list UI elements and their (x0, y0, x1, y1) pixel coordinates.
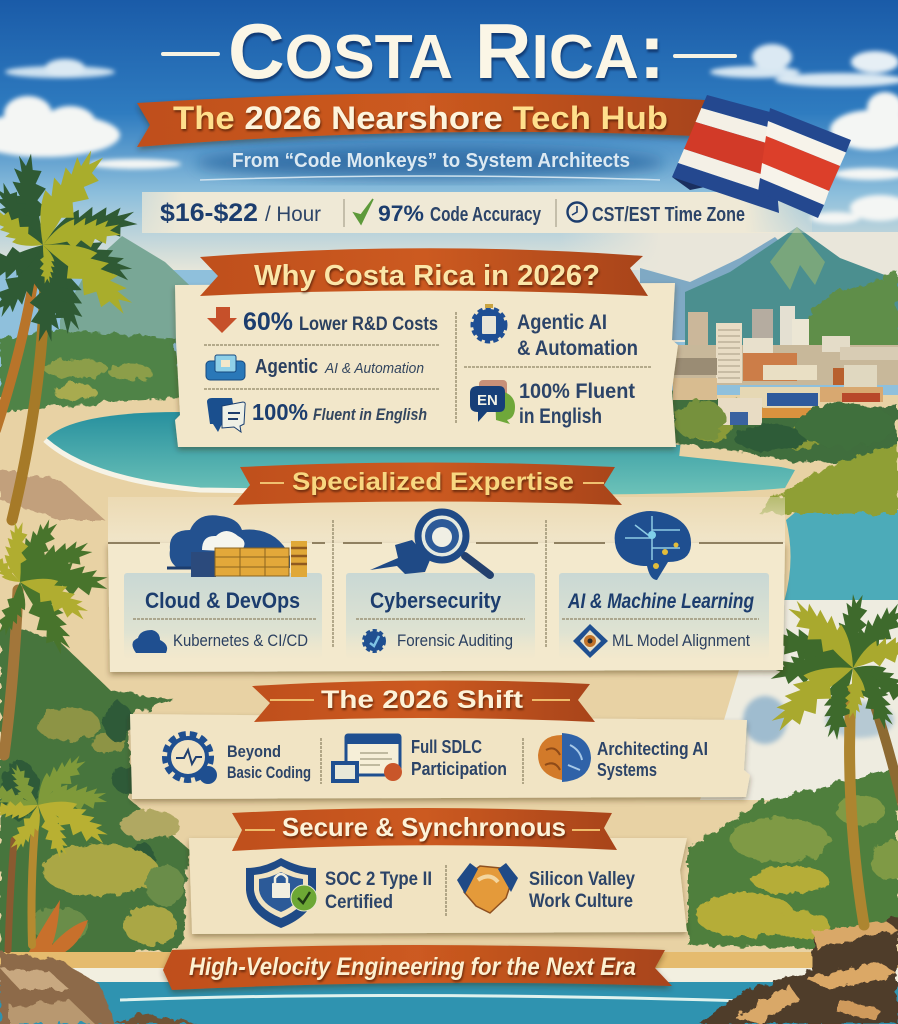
label: ml alignment: ML Model Alignment (612, 631, 750, 650)
clouds (0, 44, 898, 224)
heading: cybersecurity: Cybersecurity (370, 588, 502, 613)
text: architecting ai: Architecting AI (597, 739, 708, 759)
title: COSTA RICA: (228, 7, 665, 95)
icon: diamond eye (573, 624, 608, 658)
text: full sdlc: Participation (411, 759, 507, 779)
far clouds right (743, 696, 894, 744)
text: beyond coding (227, 742, 311, 782)
icon: automation device (206, 355, 245, 380)
pale sky behind mountains (560, 232, 898, 342)
rocks (0, 917, 898, 1024)
heading ribbon: specialized expertise: Specialized Expertise (292, 468, 574, 496)
footer ribbon (163, 945, 672, 990)
stats strip (142, 192, 812, 233)
palm trees (0, 140, 898, 950)
icon: small gear (364, 631, 384, 651)
heading: ai ml: AI & Machine Learning (567, 590, 754, 613)
bottom beach and sea (0, 962, 898, 1024)
icon: magnifier and fin (370, 512, 490, 575)
panel: the 2026 shift (130, 680, 750, 799)
item: lower costs: 60% (243, 308, 293, 336)
text: architecting ai: Systems (597, 760, 657, 780)
label: in english: in English (519, 405, 602, 428)
icon: shield with check (246, 858, 317, 928)
panel: secure and synchronous (189, 808, 687, 934)
label: forensic: Forensic Auditing (397, 631, 513, 650)
text: silicon valley (529, 869, 635, 912)
heading: cloud devops: Cloud & DevOps (145, 588, 300, 613)
text: full sdlc (411, 737, 507, 779)
flag (672, 95, 851, 218)
heading ribbon: the 2026 shift: The 2026 Shift (321, 686, 524, 714)
icon: chat bubbles (207, 398, 245, 432)
stats strip: CST/EST Time Zone (592, 204, 745, 226)
icon: handshake (457, 863, 518, 913)
item: agentic: Agentic (255, 356, 318, 378)
heading ribbon: why costa rica (200, 248, 648, 296)
heading ribbon: secure: Secure & Synchronous (282, 812, 566, 842)
label: automation: & Automation (517, 337, 638, 360)
text: soc 2 (325, 869, 432, 913)
heading ribbon: specialized expertise (233, 462, 622, 505)
foreground trees below city (674, 400, 895, 452)
icon: down arrow (207, 307, 237, 333)
icon: browser window (333, 735, 402, 781)
heading ribbon: why costa rica: Why Costa Rica in 2026? (254, 260, 600, 292)
text: soc 2: Certified (325, 892, 393, 913)
mountains (60, 227, 898, 350)
heading ribbon: secure (232, 808, 617, 851)
city skyline (673, 306, 898, 425)
label: fluent: Fluent in English (313, 405, 427, 424)
subtitle ribbon: The 2026 Nearshore Tech Hub (173, 100, 668, 136)
icon: brain (538, 733, 591, 782)
tagline (195, 147, 665, 180)
item: agentic ai: Agentic AI (517, 311, 607, 334)
subtitle ribbon (137, 93, 705, 147)
stats strip: 97% (378, 201, 424, 226)
icon: ai brain (615, 511, 691, 580)
orange plant (22, 900, 95, 968)
text: beyond coding: Beyond (227, 742, 281, 761)
panel: specialized expertise (108, 462, 785, 672)
text: silicon valley: Silicon Valley (529, 869, 635, 890)
icon: EN bubble (470, 380, 515, 424)
item: fluent: 100% (252, 399, 308, 425)
heading ribbon: the 2026 shift (252, 680, 595, 722)
text: silicon valley: Work Culture (529, 891, 633, 912)
text: architecting ai (597, 739, 708, 780)
item: ai automation: AI & Automation (324, 360, 424, 377)
jungle (0, 330, 898, 962)
label: lower costs: Lower R&D Costs (299, 314, 438, 335)
icon: code gear (165, 734, 217, 784)
stats strip: $16-$22 (160, 199, 258, 227)
icon: cloud and servers (167, 515, 307, 577)
text: beyond coding: Basic Coding (227, 763, 311, 782)
icon: gear chip (473, 304, 505, 341)
tagline: From “Code Monkeys” to System Architects (232, 150, 630, 172)
stats strip: Code Accuracy (430, 204, 542, 226)
footer ribbon: High-Velocity Engineering for the Next Era (189, 953, 636, 981)
stats strip: / Hour (265, 203, 321, 226)
panel: why costa rica (175, 248, 678, 447)
icon: EN bubble: EN (477, 392, 498, 409)
text: soc 2: SOC 2 Type II (325, 869, 432, 890)
sand and water (0, 395, 898, 960)
label: kubernetes: Kubernetes & CI/CD (173, 631, 308, 650)
icon: small cloud (132, 630, 167, 653)
text: full sdlc: Full SDLC (411, 737, 482, 757)
item: 100% fluent: 100% Fluent (519, 380, 635, 403)
